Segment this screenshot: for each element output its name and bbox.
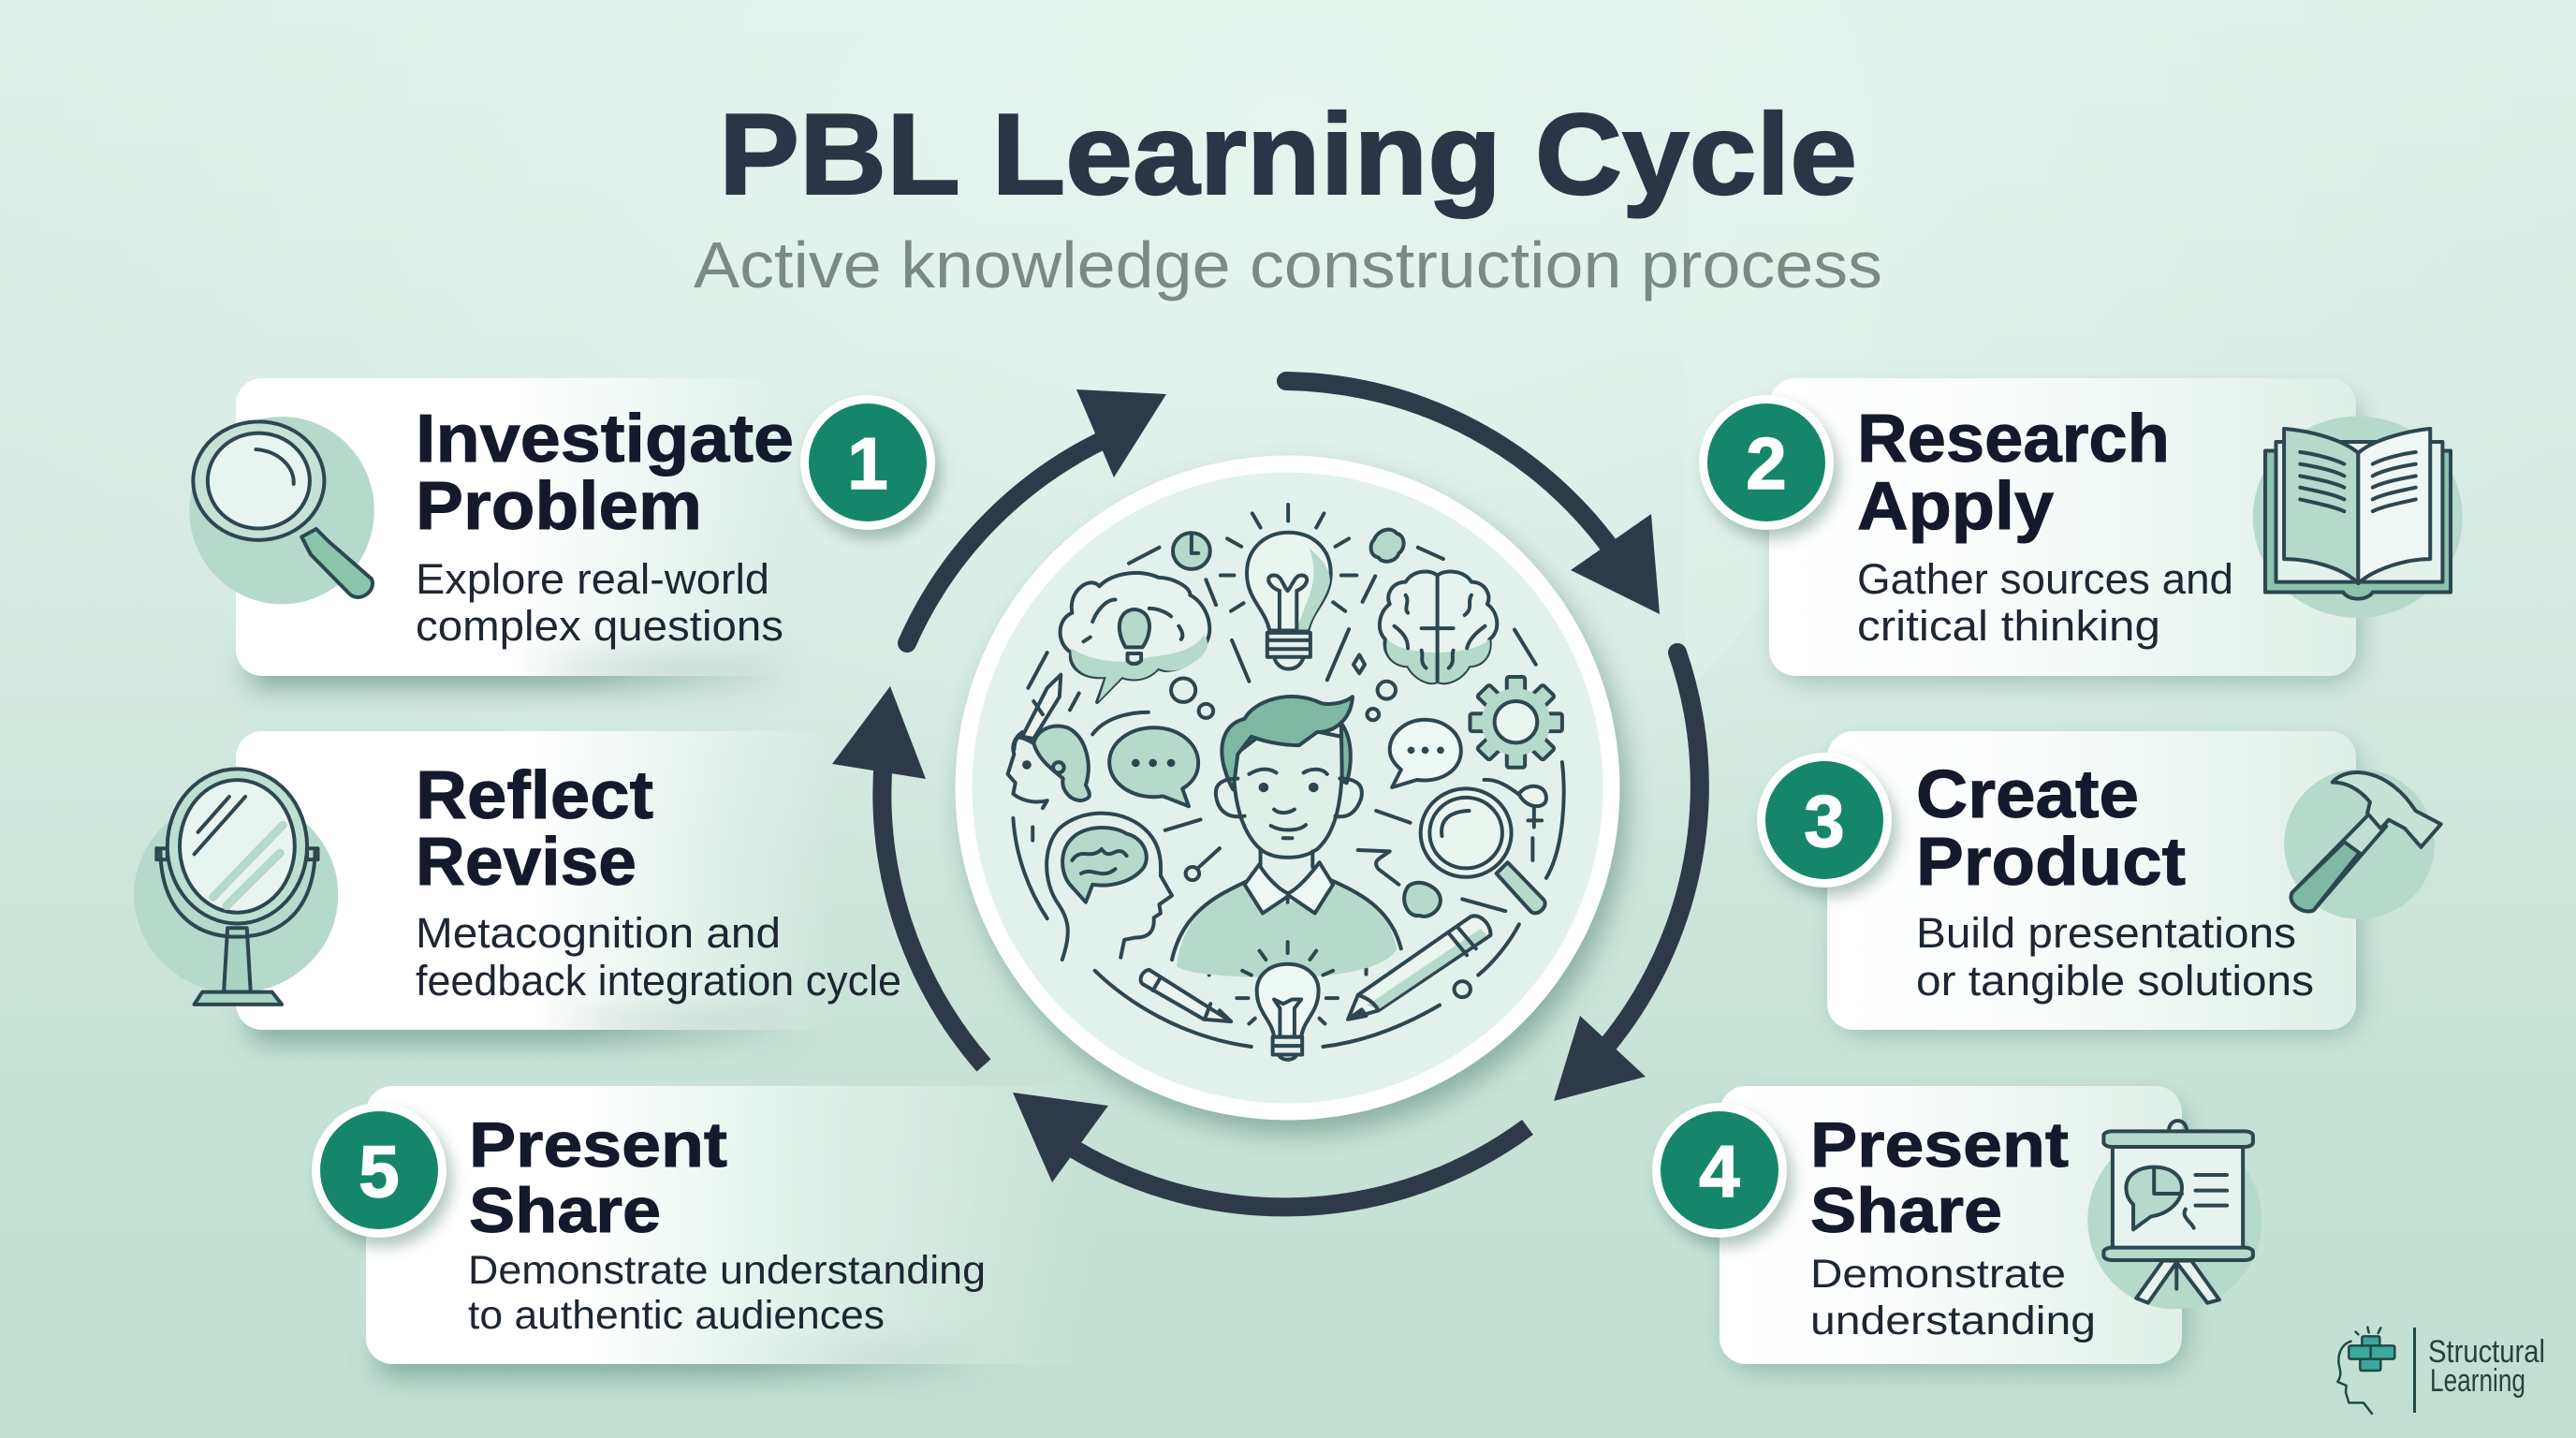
heading: Present (469, 1109, 727, 1181)
icon: magnifying glass (189, 417, 374, 604)
icon: side profile child with pencil (1008, 675, 1090, 808)
heading: Investigate (416, 402, 794, 477)
description: Build presentations (1916, 909, 2296, 957)
icon: head with brain (1046, 814, 1172, 960)
heading: Apply (1857, 469, 2054, 544)
icon: top light bulb (1247, 533, 1331, 669)
card 6: Reflect Revise (134, 731, 901, 1043)
description: Explore real-world (416, 555, 769, 603)
description: complex questions (416, 602, 783, 650)
description: feedback integration cycle (416, 957, 901, 1005)
description (416, 555, 783, 650)
heading: Create (1916, 757, 2139, 832)
subtitle: Active knowledge construction process (694, 228, 1882, 301)
badge 1 (800, 395, 941, 539)
icon: right speech bubble (1390, 720, 1461, 787)
description (1916, 909, 2314, 1005)
icon: gear (1470, 677, 1562, 768)
badge 3 (1757, 753, 1897, 897)
heading: Problem (416, 469, 702, 544)
logo wordmark: Learning (2430, 1363, 2525, 1399)
arrow: step 2 to 3 (1554, 653, 1700, 1101)
decorative rays and dashes (1013, 505, 1564, 1047)
arrow: step 4 to 5 (832, 686, 984, 1065)
heading (416, 402, 794, 544)
icon: brain right (1380, 572, 1497, 682)
logo: Structural Learning (2337, 1328, 2545, 1414)
icon: large pencil (1348, 916, 1490, 1020)
heading: Share (469, 1175, 661, 1246)
heading: Present (1810, 1109, 2069, 1181)
badge 4 (1652, 1103, 1793, 1247)
logo icon (2337, 1328, 2394, 1414)
description (1857, 555, 2233, 650)
icon: clock (1173, 533, 1210, 569)
heading: Revise (416, 825, 637, 900)
badge 5 (312, 1103, 452, 1247)
description: to authentic audiences (468, 1293, 885, 1338)
logo wordmark (2428, 1334, 2545, 1399)
title: PBL Learning Cycle (719, 91, 1857, 219)
icon: small pencil (1141, 970, 1231, 1021)
icon: flower and cloud doodles (1358, 786, 1546, 917)
description: understanding (1810, 1299, 2096, 1343)
icon: left speech bubble (1109, 727, 1198, 806)
arrow: step 1 to 2 (1286, 381, 1660, 614)
icon: right magnifier (1421, 788, 1545, 913)
description (468, 1248, 986, 1338)
small circles (1171, 678, 1471, 997)
description: critical thinking (1857, 602, 2160, 650)
icon: small cloud (1371, 530, 1404, 562)
badge 5: 5 (359, 1130, 400, 1212)
icon: mirror (134, 769, 338, 1005)
central illustration (955, 455, 1628, 1134)
icon: open book (2253, 417, 2463, 618)
card 3: Create Product (1827, 731, 2441, 1033)
description: Gather sources and (1857, 555, 2233, 603)
description (416, 909, 901, 1005)
description: or tangible solutions (1916, 957, 2314, 1005)
icon: hammer (2284, 769, 2441, 919)
line art scene (1008, 505, 1564, 1060)
card 4: Present Share (1720, 1086, 2261, 1369)
icon: presentation board (2087, 1121, 2261, 1309)
heading: Reflect (416, 758, 653, 833)
card 2: Research Apply (1769, 378, 2463, 680)
heading: Research (1857, 402, 2170, 477)
logo divider (2413, 1328, 2416, 1413)
arrow: step 3 to 4 (1013, 1093, 1528, 1207)
icon: person (1172, 697, 1401, 977)
cycle arrows (832, 381, 1700, 1207)
icon: sparkle (1354, 654, 1365, 673)
description (1810, 1252, 2096, 1343)
badge 2: 2 (1746, 422, 1787, 505)
description: Demonstrate understanding (468, 1248, 986, 1293)
logo wordmark: Structural (2428, 1334, 2545, 1370)
heading (1810, 1109, 2069, 1246)
heading (1857, 402, 2170, 544)
description: Metacognition and (416, 909, 781, 957)
icon: thought cloud with bulb (1061, 573, 1209, 702)
badge 4: 4 (1699, 1130, 1740, 1212)
card 5: Present Share (366, 1086, 1096, 1376)
arrow: step 5 to 1 (907, 389, 1166, 643)
heading (416, 758, 653, 900)
description: Demonstrate (1810, 1252, 2066, 1297)
badge 2 (1699, 395, 1839, 539)
badge 3: 3 (1804, 780, 1845, 862)
badge 1: 1 (847, 422, 888, 505)
card 1: Investigate Problem (189, 378, 799, 689)
heading (469, 1109, 727, 1246)
icon: bottom bulb (1237, 942, 1338, 1060)
heading: Share (1810, 1175, 2002, 1246)
heading: Product (1916, 825, 2186, 900)
heading (1916, 757, 2186, 900)
